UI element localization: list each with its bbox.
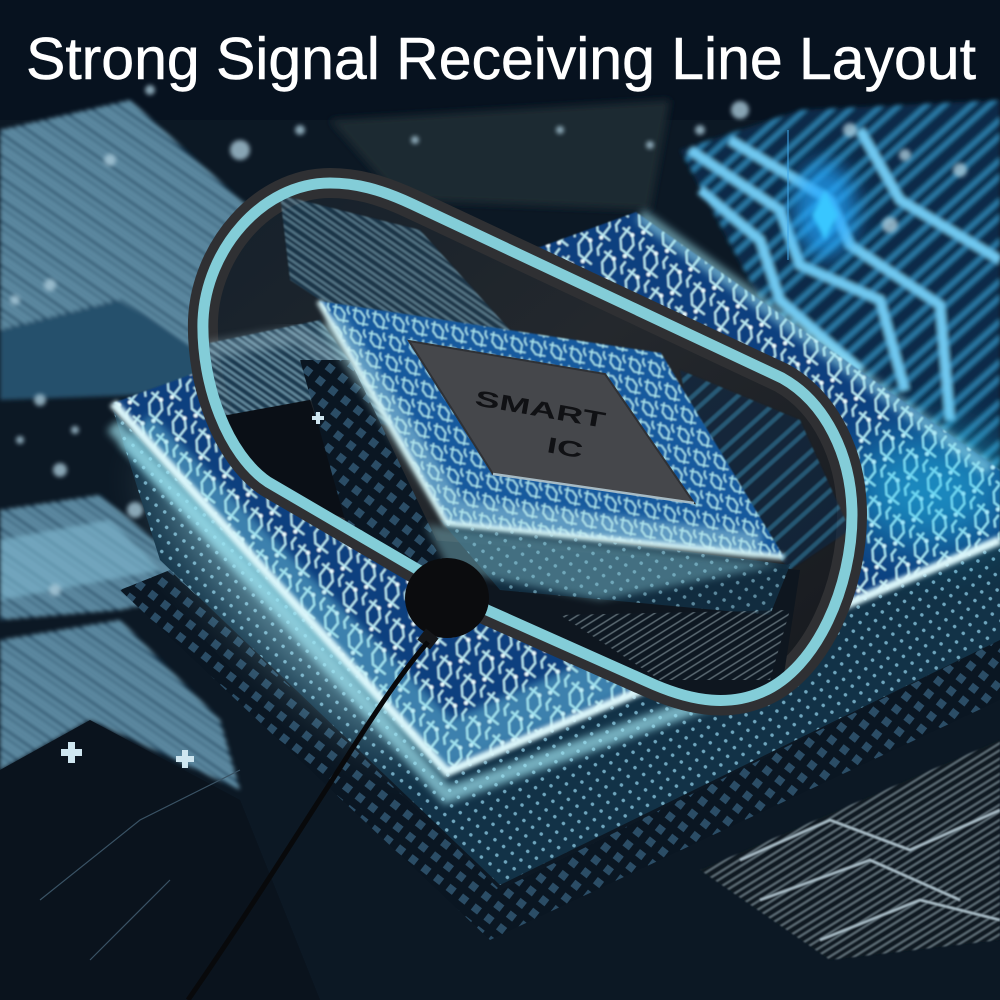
background: bokeh dots xyxy=(10,85,967,596)
background: upper-centre dark board xyxy=(330,100,670,210)
SMART IC: grey chip with label xyxy=(409,341,694,503)
chip text: IC: IC xyxy=(545,432,585,463)
interior: dark chip shadow with dots xyxy=(300,360,442,566)
background: upper-right glowing traces xyxy=(680,100,1000,500)
interior: upper traces and dark board xyxy=(280,195,510,340)
antenna: cyan glowing ring xyxy=(203,183,852,700)
background: bright blue signal glow xyxy=(788,130,857,260)
background: upper-left blurred traces xyxy=(0,100,340,400)
lower chip base: dotted substrate xyxy=(113,410,1000,885)
background sparkle crosses xyxy=(61,412,324,768)
interior: upper chip with glowing edge xyxy=(319,301,784,557)
chip text: SMART: SMART xyxy=(473,385,608,433)
background: bottom-right grey traces xyxy=(700,740,1000,960)
antenna: cable xyxy=(188,642,428,1000)
background: left blurred traces xyxy=(0,495,240,790)
antenna interior: circuit seen through glass xyxy=(200,195,850,700)
title: Strong Signal Receiving Line Layout xyxy=(26,26,976,92)
lower chip base: dark block strip xyxy=(120,570,1000,940)
lower chip: glowing processor xyxy=(113,212,1000,795)
background: bottom-left dark area xyxy=(0,720,320,1000)
antenna: translucent pill body xyxy=(203,183,852,700)
antenna: cable hub xyxy=(405,558,489,649)
